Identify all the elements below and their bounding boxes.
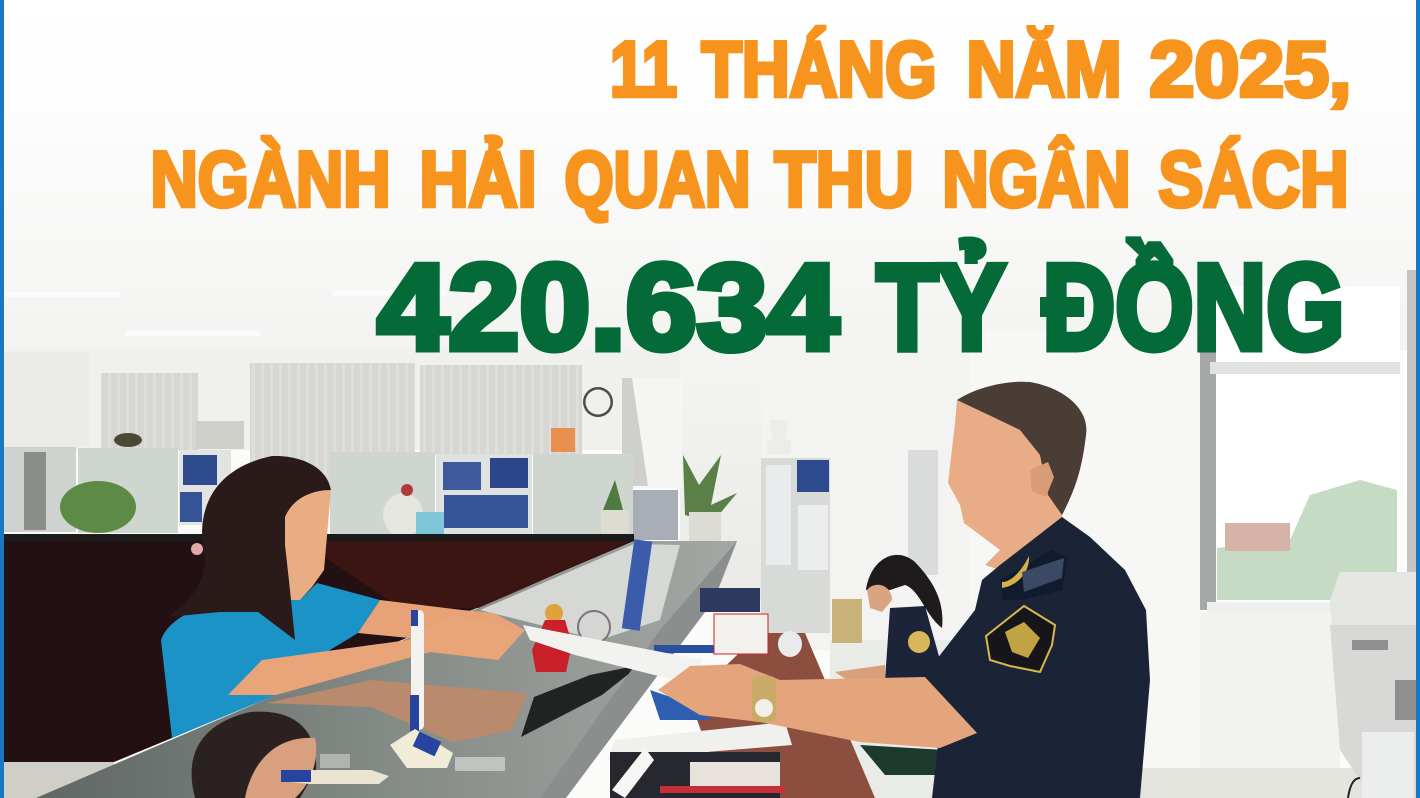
back counter with documents bbox=[608, 588, 875, 798]
officer in uniform bbox=[658, 382, 1150, 798]
title line 3: headline figure: ĐỒNG bbox=[1042, 239, 1344, 375]
title line 1: THÁNG bbox=[702, 25, 936, 113]
title line 1: NĂM bbox=[966, 25, 1122, 113]
title line 2: HẢI bbox=[420, 135, 536, 223]
plants on counter bbox=[60, 455, 737, 544]
cabinets and shelves bbox=[4, 420, 938, 643]
title line 2: NGÂN bbox=[942, 135, 1130, 223]
title line 2: SÁCH bbox=[1158, 135, 1348, 223]
woman reflection on counter bbox=[192, 680, 527, 798]
title line 3: headline figure: 420.634 bbox=[378, 239, 839, 375]
title line 3: headline figure bbox=[378, 239, 1344, 375]
printer bbox=[1330, 572, 1416, 798]
window blinds bbox=[101, 363, 682, 488]
woman in blue polo bbox=[161, 456, 525, 738]
title line 2: THU bbox=[774, 135, 914, 223]
title line 2: QUAN bbox=[564, 135, 750, 223]
title line 1: 11 bbox=[610, 25, 677, 113]
wall clock bbox=[583, 387, 613, 417]
title line 1 bbox=[610, 25, 1352, 113]
title line 3: headline figure: TỶ bbox=[876, 239, 1006, 375]
handed document bbox=[523, 625, 702, 684]
title line 2: NGÀNH bbox=[150, 135, 390, 223]
red mascot figurine bbox=[532, 604, 572, 672]
right window with trees bbox=[1200, 270, 1416, 612]
pen on stand bbox=[281, 610, 505, 784]
title line 2 bbox=[150, 135, 1348, 223]
glass counter top bbox=[36, 539, 737, 798]
seated officer in background bbox=[835, 555, 945, 775]
dark wooden counter bbox=[4, 534, 634, 762]
title line 1: 2025, bbox=[1150, 25, 1352, 113]
